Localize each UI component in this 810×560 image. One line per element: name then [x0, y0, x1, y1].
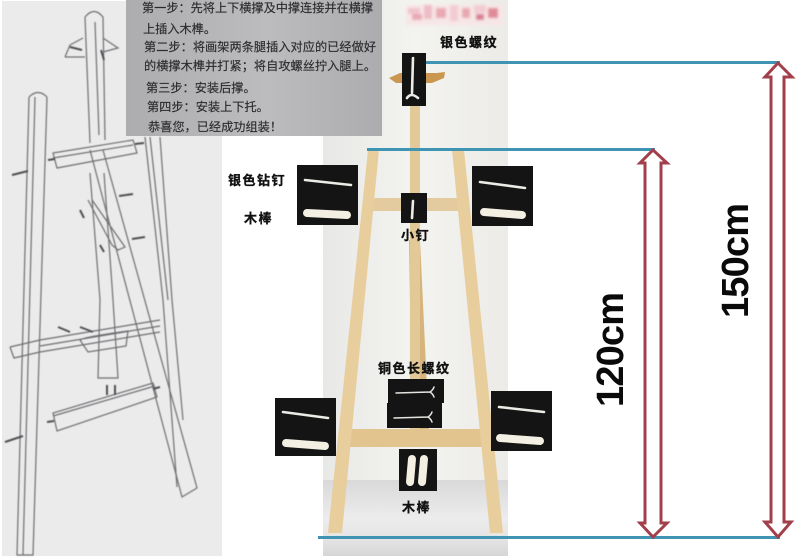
sketch: right leg — [145, 137, 183, 487]
panel: line drawing of easel assembly — [2, 1, 222, 556]
arrow: 150cm dimension — [765, 63, 792, 537]
instruction closing: 恭喜您，已经成功组装！ — [148, 119, 282, 134]
instruction step 1: 第一步：先将上下横撑及中撑连接并在横撑 — [142, 0, 373, 15]
part: two dowels — [399, 449, 437, 491]
dimension label: 150cm: 150cm — [715, 203, 757, 318]
arrow: 120cm dimension — [640, 150, 667, 537]
part: silver screw top — [402, 53, 426, 106]
easel: wooden frame — [328, 58, 503, 533]
instruction step 2: 第二步：将画架两条腿插入对应的已经做好 — [144, 39, 376, 54]
part: copper long screws — [387, 379, 444, 428]
right front leg — [452, 150, 503, 533]
sketch: left leg — [17, 92, 47, 555]
instruction step 2 continued: 的横撑木榫并打紧；将自攻螺丝拧入腿上。 — [144, 58, 376, 73]
top holder — [389, 72, 445, 83]
centre mast — [410, 58, 420, 430]
panel: easel photo background — [323, 0, 508, 556]
part: small nail — [401, 193, 427, 223]
part: silver nail and dowel upper left — [297, 165, 358, 225]
sketch: centre mast — [85, 12, 118, 378]
label: dowel bottom: 木棒 — [402, 500, 431, 515]
guide line: floor — [318, 536, 780, 539]
sketch: upper crossbar — [53, 140, 137, 168]
label: silver nail: 银色钻钉 — [228, 173, 286, 188]
sketch: rear brace — [88, 150, 197, 497]
sketch: middle crossbar with bracket — [10, 320, 160, 358]
part: nail and dowel lower right — [491, 391, 552, 451]
part: nail and dowel lower left — [275, 398, 336, 456]
sketch: screws — [5, 47, 160, 442]
label: silver screw: 银色螺纹 — [440, 35, 498, 50]
sketch: top holder — [65, 38, 118, 57]
label: small nail: 小钉 — [401, 228, 430, 243]
dimension label: 120cm: 120cm — [590, 292, 632, 407]
guide line: top of easel — [426, 61, 780, 64]
watermark: pixelated logo — [406, 5, 504, 25]
guide line: top of front legs — [367, 148, 655, 151]
label: copper long screw: 铜色长螺纹 — [378, 361, 451, 376]
label: dowel left: 木棒 — [244, 211, 273, 226]
panel: assembly instructions — [126, 0, 382, 136]
sketch: lower tray — [53, 383, 157, 431]
rear brace — [409, 240, 429, 430]
instruction step 3: 第三步：安装后撑。 — [146, 80, 256, 95]
instruction step 1 continued: 上插入木榫。 — [143, 21, 216, 36]
lower crossbar — [345, 429, 491, 447]
left front leg — [328, 150, 379, 533]
part: silver nail and dowel upper right — [472, 166, 533, 226]
instruction step 4: 第四步：安装上下托。 — [147, 99, 269, 114]
upper crossbar — [372, 198, 458, 211]
